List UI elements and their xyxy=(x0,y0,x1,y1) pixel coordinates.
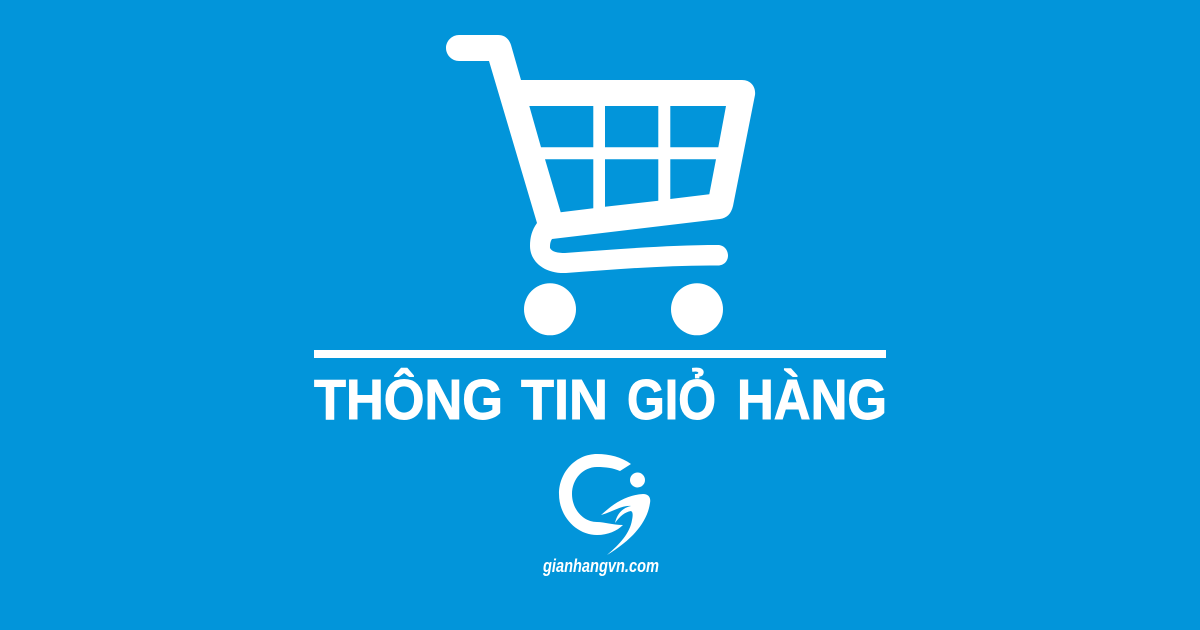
title: TIN xyxy=(521,368,608,432)
logo figure xyxy=(601,494,650,555)
title: THÔNG xyxy=(314,367,503,432)
icon: right wheel xyxy=(671,283,723,335)
title xyxy=(314,367,887,432)
title: HÀNG xyxy=(737,368,887,432)
logo head xyxy=(630,472,645,488)
icon: left wheel xyxy=(524,283,576,335)
icon: shopping cart xyxy=(446,35,755,335)
title: GIỎ xyxy=(627,367,716,432)
logo ring xyxy=(559,454,631,535)
logo: gianhangvn xyxy=(542,454,659,576)
divider rule xyxy=(314,350,886,358)
logo wordmark: gianhangvn.com xyxy=(542,556,659,576)
